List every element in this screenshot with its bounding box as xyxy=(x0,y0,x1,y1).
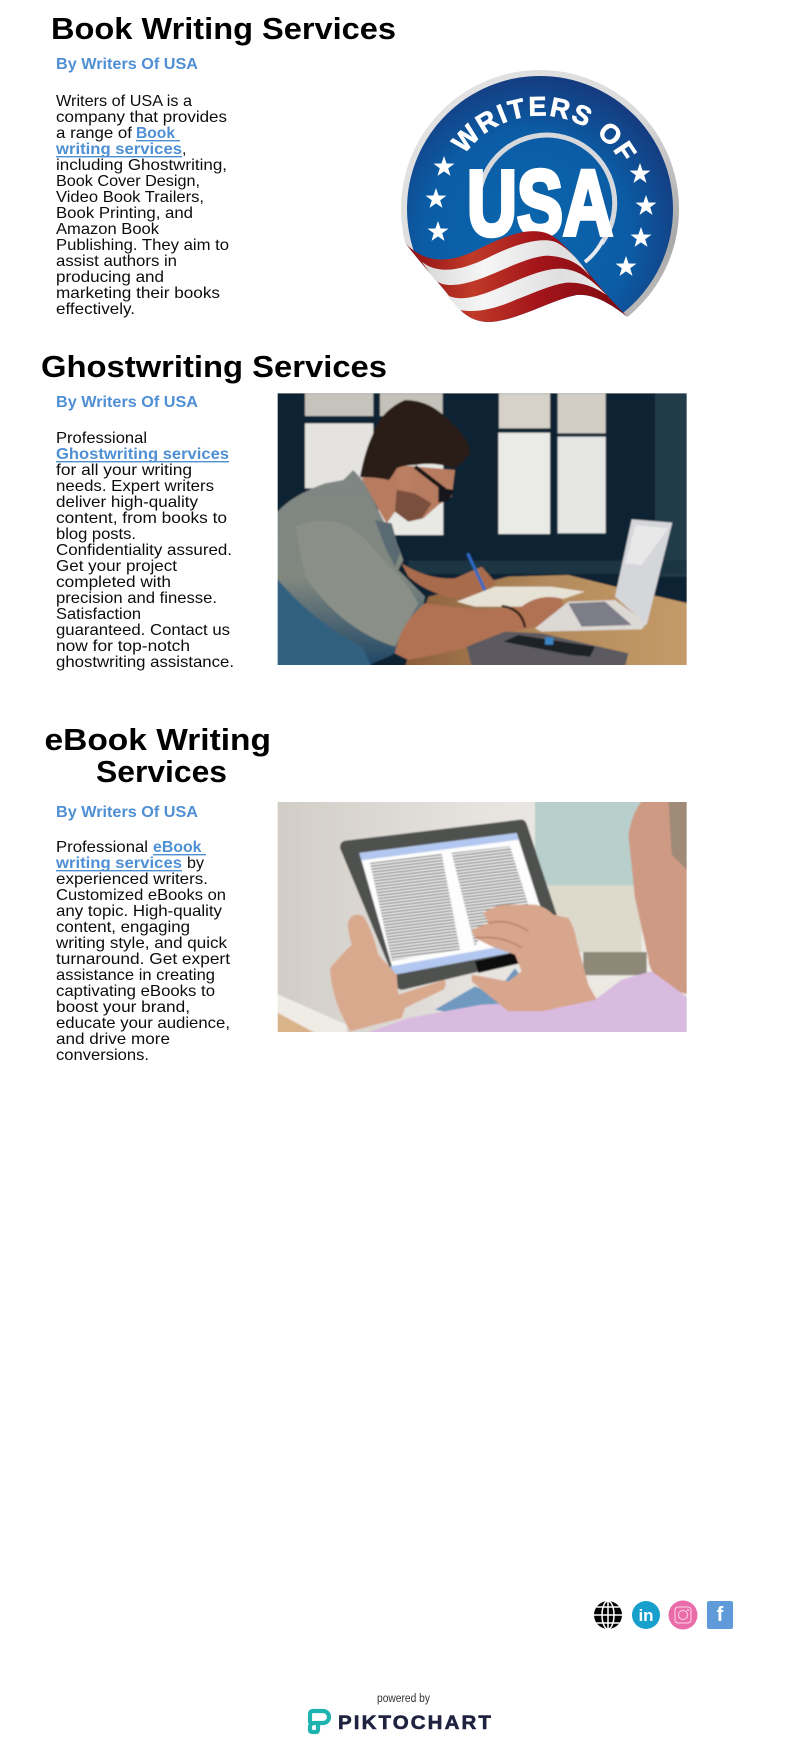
flag xyxy=(390,231,643,367)
panel: book writing services xyxy=(51,11,679,322)
heading: eBook Writing Services: Services xyxy=(96,754,227,789)
photo: man writing at a laptop xyxy=(275,390,688,667)
text block: company description: producing and xyxy=(56,269,164,286)
text block: ghostwriting description: Satisfaction xyxy=(56,606,141,623)
heading: Ghostwriting Services: Ghostwriting Services xyxy=(41,349,387,384)
text block: company description: Book Cover Design, xyxy=(56,173,200,190)
text block: ghostwriting description: Professional xyxy=(56,430,147,447)
text block: ebook description: educate your audience, xyxy=(56,1015,230,1032)
text block: ebook description: Professional xyxy=(56,839,148,856)
icon: LinkedIn: in xyxy=(638,1606,654,1625)
text block: ghostwriting description: deliver high-quality xyxy=(56,494,198,511)
text block: company description: Book Printing, and xyxy=(56,205,193,222)
icon: Writers of USA badge xyxy=(401,70,679,322)
text block: ghostwriting description: needs. Expert writers xyxy=(56,478,214,495)
text block: ebook description: writing services xyxy=(55,855,182,872)
text block: company description: Publishing. They aim to xyxy=(56,237,229,254)
text block: ebook description: and drive more xyxy=(56,1031,170,1048)
text block: ghostwriting description: now for top-notch xyxy=(56,638,190,655)
photo: hands holding an e-reader tablet xyxy=(275,798,688,1035)
text block: ghostwriting description: content, from books to xyxy=(56,510,227,527)
text block: company description: assist authors in xyxy=(56,253,177,270)
text block: ebook description: eBook xyxy=(153,839,202,856)
text block: company description: , xyxy=(182,141,186,158)
text block: ebook description: captivating eBooks to xyxy=(56,983,215,1000)
text block: company description: Book xyxy=(136,125,175,142)
byline: By Writers Of USA xyxy=(56,394,198,411)
icon: Writers of USA badge: USA xyxy=(467,151,613,255)
text block: company description: a range of xyxy=(56,125,133,142)
text block: ghostwriting description: precision and finesse. xyxy=(56,590,217,607)
text block: ghostwriting description: Confidentiality assured. xyxy=(56,542,232,559)
text block: ghostwriting description: completed with xyxy=(56,574,171,591)
icon: globe xyxy=(594,1601,622,1629)
text block: company description: marketing their books xyxy=(56,285,220,302)
text block: company description: effectively. xyxy=(56,301,135,318)
text block: company description: Video Book Trailers, xyxy=(56,189,204,206)
icon: Piktochart logo xyxy=(310,1711,329,1732)
text block: ebook description: assistance in creating xyxy=(56,967,215,984)
text block: ghostwriting description: Ghostwriting services xyxy=(56,446,229,463)
text block: ebook description: Customized eBooks on xyxy=(56,887,226,904)
icon: Facebook: f xyxy=(717,1604,724,1626)
text block: ghostwriting description: blog posts. xyxy=(56,526,136,543)
panel: ghostwriting services xyxy=(41,349,688,671)
heading: eBook Writing Services: eBook Writing xyxy=(44,722,271,757)
text block: company description: Writers of USA is a xyxy=(56,93,192,110)
text block: company description xyxy=(55,93,229,318)
text block: ebook description: conversions. xyxy=(56,1047,149,1064)
text: Piktochart wordmark: PIKTOCHART xyxy=(338,1712,493,1734)
text block: ebook description: experienced writers. xyxy=(56,871,208,888)
heading: Book Writing Services: Book Writing Services xyxy=(51,11,396,46)
text block: ebook description: writing style, and quick xyxy=(55,935,228,952)
footer: powered by Piktochart xyxy=(310,1693,493,1734)
icon: Instagram xyxy=(668,1600,698,1630)
text block: ebook description xyxy=(55,839,231,1064)
text block: company description: writing services xyxy=(55,141,182,158)
text block: company description: company that provides xyxy=(56,109,227,126)
text block: ghostwriting description: guaranteed. Contact us xyxy=(56,622,230,639)
text: powered by: powered by xyxy=(377,1693,430,1705)
text block: company description: including Ghostwriting, xyxy=(56,157,227,174)
text block: ebook description: by xyxy=(187,855,204,872)
text block: ebook description: any topic. High-quality xyxy=(56,903,222,920)
byline: By Writers Of USA xyxy=(56,804,198,821)
panel: ebook writing services xyxy=(44,722,688,1064)
text block: ghostwriting description xyxy=(56,430,234,671)
text block: ghostwriting description: for all your writing xyxy=(56,462,192,479)
heading: eBook Writing Services xyxy=(44,722,271,789)
text block: ghostwriting description: ghostwriting assistance. xyxy=(56,654,234,671)
text block: company description: Amazon Book xyxy=(56,221,160,238)
text block: ghostwriting description: Get your project xyxy=(56,558,178,575)
icon: Writers of USA badge: WRITERS OF xyxy=(450,96,638,159)
text block: ebook description: boost your brand, xyxy=(56,999,190,1016)
panel: social icons xyxy=(594,1600,733,1630)
text block: ebook description: turnaround. Get expert xyxy=(56,951,231,968)
byline: By Writers Of USA xyxy=(56,56,198,73)
text block: ebook description: content, engaging xyxy=(56,919,190,936)
